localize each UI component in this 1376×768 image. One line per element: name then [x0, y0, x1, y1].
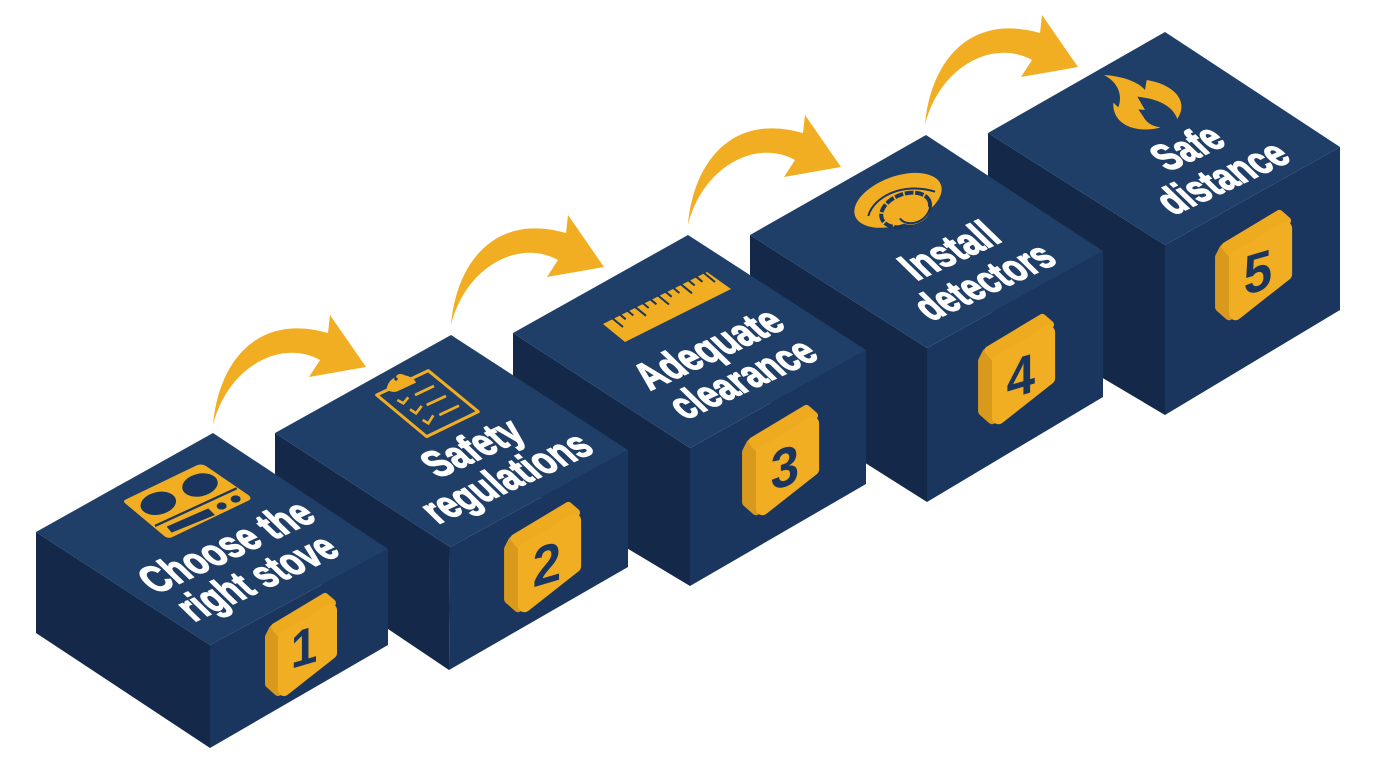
heading: Install detectors: detectors: [903, 235, 1067, 329]
step 1 block: [36, 433, 388, 748]
arrow from step 2 to step 3: [451, 215, 604, 325]
arrow from step 3 to step 4: [688, 115, 841, 225]
number badge 3: [746, 409, 814, 511]
heading: Adequate clearance: clearance: [658, 331, 828, 428]
heading: Adequate clearance: [623, 300, 828, 428]
icon: stove: [124, 464, 250, 538]
icon: smoke detector: [847, 162, 949, 238]
arrow from step 1 to step 2: [213, 315, 366, 425]
heading: Safe distance: distance: [1145, 133, 1301, 223]
step 2 block: [275, 335, 628, 670]
step 4 block: [750, 135, 1103, 502]
heading: Safe distance: Safe: [1140, 117, 1236, 179]
icon: ruler: [603, 272, 731, 342]
number badge 3: 3: [771, 432, 799, 503]
heading: Safety regulations: regulations: [410, 425, 604, 532]
number badge 2: 2: [533, 529, 561, 600]
number badge 5: 5: [1244, 237, 1272, 308]
heading: Choose the right stove: right stove: [166, 527, 350, 630]
icon: clipboard checklist: [377, 371, 478, 437]
arrow from step 4 to step 5: [925, 15, 1078, 125]
heading: Safety regulations: Safety: [411, 411, 535, 486]
heading: Choose the right stove: Choose the: [128, 492, 326, 602]
step 5 block: [988, 32, 1340, 415]
heading: Install detectors: Install: [889, 214, 1011, 289]
number badge 1: 1: [291, 614, 317, 680]
number badge 4: [982, 318, 1050, 420]
heading: Choose the right stove: [128, 492, 350, 630]
step 3 block: [513, 235, 866, 586]
number badge 1: [269, 597, 332, 692]
number badge 2: [508, 506, 576, 608]
number badge 4: 4: [1007, 341, 1036, 412]
icon: flame: [1104, 75, 1181, 129]
number badge 5: [1219, 214, 1287, 316]
heading: Adequate clearance: Adequate: [623, 300, 795, 398]
